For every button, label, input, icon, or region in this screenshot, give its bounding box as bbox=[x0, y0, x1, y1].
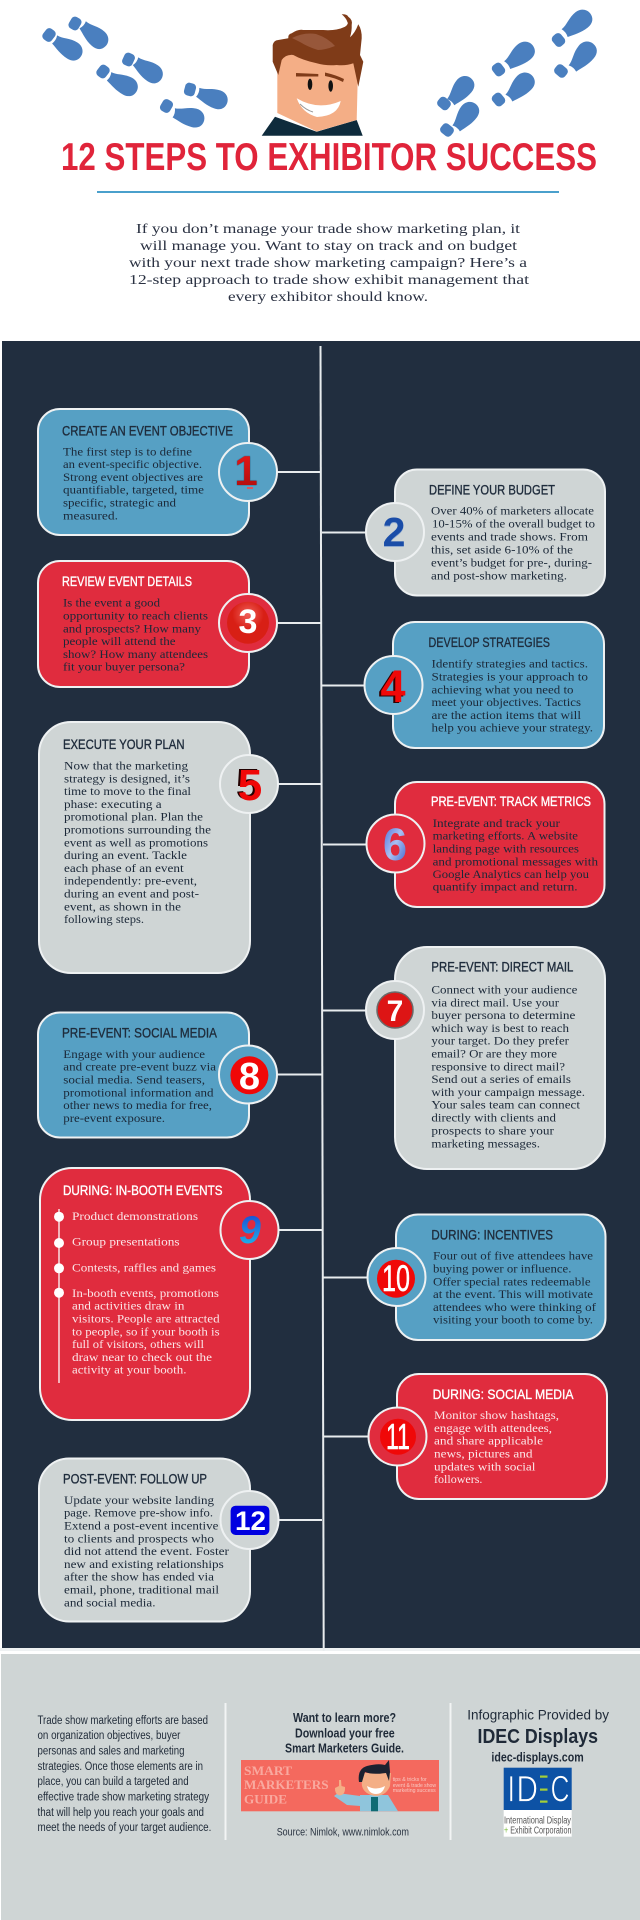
banner: smart marketers guide: SMART bbox=[244, 1764, 293, 1778]
body text: step 7: marketing messages. bbox=[431, 1138, 540, 1150]
body text: step 5: event, as shown in the bbox=[64, 901, 181, 913]
bullet text: and activities draw in bbox=[72, 1301, 185, 1313]
body text: step 12: and social media. bbox=[64, 1597, 156, 1609]
heading: step 4: DEVELOP STRATEGIES bbox=[428, 635, 550, 650]
body text: step 11: and share applicable bbox=[434, 1436, 543, 1448]
body text: step 11 bbox=[434, 1410, 559, 1486]
bullet text: full of visitors, others will bbox=[72, 1339, 204, 1351]
body text: step 1 bbox=[63, 446, 204, 522]
badge: number 6: 6 bbox=[383, 819, 407, 870]
logo: IDEC: I bbox=[508, 1769, 515, 1810]
body text: step 5: following steps. bbox=[64, 914, 144, 926]
panel: step 3 bbox=[38, 561, 321, 687]
body text: step 7: which way is best to reach bbox=[431, 1023, 569, 1035]
bullet text: activity at your booth. bbox=[72, 1365, 187, 1377]
body text: step 12: page. Remove pre-show info. bbox=[64, 1508, 213, 1520]
badge: number 1: 1 bbox=[234, 447, 258, 494]
footer summary text: Trade show marketing efforts are based bbox=[38, 1715, 208, 1727]
body text: step 1: Strong event objectives are bbox=[63, 472, 203, 484]
panel: step 12 bbox=[39, 1458, 322, 1622]
body text: step 5: Now that the marketing bbox=[64, 761, 188, 773]
banner: smart marketers guide bbox=[241, 1760, 439, 1811]
heading: step 12: POST-EVENT: FOLLOW UP bbox=[63, 1472, 207, 1486]
body text: step 2: events and trade shows. From bbox=[431, 532, 588, 544]
banner: smart marketers guide: GUIDE bbox=[244, 1792, 287, 1806]
panel: step 4 bbox=[322, 622, 604, 748]
bullet text: In-booth events, promotions bbox=[72, 1288, 220, 1300]
body text: step 12: email, phone, traditional mail bbox=[64, 1585, 219, 1597]
body text: step 1: specific, strategic and bbox=[63, 497, 176, 509]
badge: number 5: 5 bbox=[238, 761, 262, 810]
icon: pointing man bbox=[334, 1760, 398, 1811]
body text: step 10 bbox=[433, 1251, 596, 1327]
body text: step 6: quantify impact and return. bbox=[433, 882, 578, 894]
body text: step 11: engage with attendees, bbox=[434, 1423, 552, 1435]
panel: step 10 bbox=[323, 1214, 606, 1340]
body text: step 2: this, set aside 6-10% of the bbox=[431, 544, 573, 556]
badge: number 9 bbox=[220, 1201, 278, 1259]
intro text bbox=[129, 222, 529, 305]
badge: number 5 bbox=[220, 755, 278, 813]
body text: step 10: buying power or influence. bbox=[433, 1264, 572, 1276]
body text: step 5: time to move to the final bbox=[64, 786, 191, 798]
body text: step 4: help you achieve your strategy. bbox=[432, 723, 593, 735]
body text: step 7: with your campaign message. bbox=[431, 1087, 585, 1099]
heading: step 1: CREATE AN EVENT OBJECTIVE bbox=[62, 424, 233, 438]
body text: step 10: at the event. This will motivate bbox=[433, 1289, 593, 1301]
footprints right bbox=[435, 6, 601, 138]
body text: step 3: opportunity to reach clients bbox=[63, 610, 209, 622]
bullet text: to people, so if your booth is bbox=[72, 1326, 220, 1338]
body text: step 4: meet your objectives. Tactics bbox=[432, 697, 582, 709]
body text: step 7: prospects to share your bbox=[431, 1125, 554, 1137]
body text: step 5: independently: pre-event, bbox=[64, 876, 197, 888]
panel: step 9 bbox=[40, 1168, 322, 1420]
banner tagline: marketing success bbox=[393, 1788, 436, 1794]
body text: step 7: your target. Do they prefer bbox=[431, 1036, 569, 1048]
footer panel bbox=[1, 1654, 640, 1920]
body text: step 5 bbox=[64, 761, 211, 926]
body text: step 1: quantifiable, targeted, time bbox=[63, 485, 204, 497]
footer summary text: place, you can build a targeted and bbox=[38, 1776, 189, 1788]
source credit: Source: Nimlok, www.nimlok.com bbox=[277, 1826, 409, 1838]
body text: step 11: updates with social bbox=[434, 1461, 536, 1473]
body text: step 11: news, pictures and bbox=[434, 1448, 533, 1460]
badge: number 8 bbox=[219, 1046, 277, 1104]
panel: step 1 bbox=[38, 409, 321, 535]
body text: step 3: and prospects? How many bbox=[63, 623, 201, 635]
badge: number 3 bbox=[219, 594, 277, 652]
body text: step 12: did not attend the event. Foster bbox=[64, 1546, 229, 1558]
body text: step 7 bbox=[431, 985, 585, 1150]
body text: step 4 bbox=[432, 659, 593, 735]
body text: step 7: buyer persona to determine bbox=[431, 1010, 575, 1022]
call to action text: Want to learn more? bbox=[293, 1711, 396, 1725]
bullet text: Contests, raffles and games bbox=[72, 1262, 217, 1274]
intro text: with your next trade show marketing campaign? Here’s a bbox=[129, 256, 528, 271]
body text: step 8: Engage with your audience bbox=[63, 1049, 205, 1061]
body text: step 5: promotional plan. Plan the bbox=[64, 812, 203, 824]
body text: step 12: to clients and prospects who bbox=[64, 1533, 214, 1545]
banner tagline bbox=[393, 1777, 436, 1794]
logo: IDEC: + Exhibit Corporation bbox=[504, 1826, 572, 1836]
badge: number 12: 12 bbox=[235, 1506, 266, 1536]
bullet text: Product demonstrations bbox=[72, 1211, 199, 1223]
body text: step 3 bbox=[63, 598, 209, 674]
heading: step 7: PRE-EVENT: DIRECT MAIL bbox=[431, 960, 574, 974]
call to action text: Smart Marketers Guide. bbox=[285, 1742, 404, 1756]
body text: step 6: and promotional messages with bbox=[433, 856, 598, 868]
body text: step 8: other news to media for free, bbox=[63, 1100, 212, 1112]
body text: step 3: show? How many attendees bbox=[63, 649, 209, 661]
body text: step 12: after the show has ended via bbox=[64, 1572, 214, 1584]
body text: step 2: event’s budget for pre-, during- bbox=[431, 557, 592, 569]
badge: number 10 bbox=[368, 1248, 426, 1306]
badge: number 8: 8 bbox=[239, 1056, 260, 1098]
body text: step 5: strategy is designed, it’s bbox=[64, 773, 191, 785]
footer summary text: strategies. Once those elements are in bbox=[38, 1761, 203, 1773]
body text: step 5: promotions surrounding the bbox=[64, 824, 211, 836]
body text: step 1: The first step is to define bbox=[63, 446, 192, 458]
badge: number 11: 11 bbox=[386, 1416, 410, 1457]
badge: number 6 bbox=[366, 814, 424, 872]
body text: step 2 bbox=[431, 506, 595, 582]
body text: step 12: Extend a post-event incentive bbox=[64, 1521, 218, 1533]
body text: step 12: Update your website landing bbox=[64, 1495, 214, 1507]
panel: step 2 bbox=[322, 470, 605, 596]
body text: step 8: pre-event exposure. bbox=[63, 1113, 165, 1125]
footer summary text bbox=[38, 1715, 211, 1834]
body text: step 11: followers. bbox=[434, 1474, 483, 1486]
body text: step 10: Offer special rates redeemable bbox=[433, 1276, 591, 1288]
body text: step 8 bbox=[63, 1049, 216, 1125]
body text: step 7: responsive to direct mail? bbox=[431, 1061, 565, 1073]
call to action text: Download your free bbox=[295, 1726, 395, 1740]
provider credit: Infographic Provided by bbox=[467, 1706, 609, 1722]
body text: step 2: Over 40% of marketers allocate bbox=[431, 506, 594, 518]
badge: number 7: 7 bbox=[387, 995, 403, 1028]
body text: step 5: phase: executing a bbox=[64, 799, 162, 811]
body text: step 4: Identify strategies and tactics. bbox=[432, 659, 588, 671]
timeline vertical line bbox=[320, 346, 324, 1651]
body text: step 4: Strategies is your approach to bbox=[432, 672, 588, 684]
badge: number 12 bbox=[220, 1491, 278, 1549]
intro text: will manage you. Want to stay on track and on budget bbox=[140, 239, 517, 254]
panel: step 5 bbox=[39, 722, 321, 973]
badge: number 4 bbox=[364, 656, 422, 714]
body text: step 7: Your sales team can connect bbox=[431, 1100, 581, 1112]
banner tagline: event & trade show bbox=[393, 1783, 436, 1789]
body text: step 7: Send out a series of emails bbox=[431, 1074, 572, 1086]
logo: IDEC: D bbox=[516, 1769, 538, 1810]
panel: step 8 bbox=[38, 1012, 322, 1138]
body text: step 3: people will attend the bbox=[63, 636, 176, 648]
body text: step 5: during an event and post- bbox=[64, 888, 199, 900]
intro text: If you don’t manage your trade show marketing plan, it bbox=[136, 222, 520, 237]
badge: number 11 bbox=[368, 1408, 426, 1466]
bullet text: visitors. People are attracted bbox=[72, 1313, 220, 1325]
footer summary text: on organization objectives, buyer bbox=[38, 1730, 181, 1742]
footer summary text: that will help you reach your goals and bbox=[38, 1807, 204, 1819]
body text: step 12: new and existing relationships bbox=[64, 1559, 224, 1571]
footer summary text: personas and sales and marketing bbox=[38, 1746, 184, 1758]
body text: step 6: landing page with resources bbox=[433, 843, 580, 855]
body text: step 10: visiting your booth to come by. bbox=[433, 1315, 593, 1327]
bullet text: Group presentations bbox=[72, 1237, 180, 1249]
banner: smart marketers guide: MARKETERS bbox=[244, 1778, 329, 1792]
logo: IDEC: International Display bbox=[504, 1815, 571, 1826]
body text: step 8: and create pre-event buzz via bbox=[63, 1062, 216, 1074]
body text: step 2: and post-show marketing. bbox=[431, 570, 567, 582]
body text: step 8: social media. Send teasers, bbox=[63, 1074, 205, 1086]
body text: step 6: Integrate and track your bbox=[433, 818, 560, 830]
provider credit bbox=[467, 1706, 609, 1764]
intro text: every exhibitor should know. bbox=[228, 290, 428, 305]
bullet timeline bbox=[54, 1209, 64, 1383]
panel: step 11 bbox=[324, 1374, 607, 1499]
heading: step 11: DURING: SOCIAL MEDIA bbox=[433, 1387, 574, 1402]
badge: number 3: 3 bbox=[239, 603, 257, 641]
bullet text: draw near to check out the bbox=[72, 1352, 212, 1364]
body text: step 7: Connect with your audience bbox=[431, 985, 577, 997]
body text: step 6: Google Analytics can help you bbox=[433, 869, 589, 881]
provider credit: IDEC Displays bbox=[478, 1726, 598, 1748]
footprints left bbox=[41, 15, 230, 130]
body text: step 6: marketing efforts. A website bbox=[433, 831, 578, 843]
footer summary text: effective trade show marketing strategy bbox=[38, 1792, 209, 1804]
bullet text bbox=[72, 1211, 220, 1377]
heading: step 6: PRE-EVENT: TRACK METRICS bbox=[431, 794, 591, 809]
logo: IDEC bbox=[504, 1768, 572, 1837]
badge: number 2: 2 bbox=[383, 509, 405, 555]
body text: step 5: event as well as promotions bbox=[64, 837, 209, 849]
call to action text bbox=[285, 1711, 404, 1756]
provider credit: idec-displays.com bbox=[491, 1750, 584, 1764]
dark timeline panel bbox=[2, 341, 640, 1648]
heading: step 8: PRE-EVENT: SOCIAL MEDIA bbox=[62, 1026, 217, 1040]
footer summary text: meet the needs of your target audience. bbox=[38, 1822, 211, 1834]
body text: step 12 bbox=[64, 1495, 229, 1609]
body text: step 5: each phase of an event bbox=[64, 863, 185, 875]
body text: step 5: during an event. Tackle bbox=[64, 850, 187, 862]
body text: step 11: Monitor show hashtags, bbox=[434, 1410, 559, 1422]
badge: number 7 bbox=[366, 981, 424, 1039]
body text: step 2: 10-15% of the overall budget to bbox=[432, 519, 595, 531]
body text: step 4: achieving what you need to bbox=[432, 684, 574, 696]
badge: number 4: 4 bbox=[380, 661, 406, 712]
icon: smiling man mascot bbox=[262, 14, 363, 136]
body text: step 7: directly with clients and bbox=[431, 1113, 556, 1125]
heading: step 2: DEFINE YOUR BUDGET bbox=[429, 482, 555, 498]
badge: number 9: 9 bbox=[239, 1209, 261, 1252]
banner tagline: tips & tricks for bbox=[393, 1777, 427, 1783]
body text: step 3: fit your buyer persona? bbox=[63, 662, 185, 674]
intro text: 12-step approach to trade show exhibit management that bbox=[129, 273, 529, 288]
heading: step 9: DURING: IN-BOOTH EVENTS bbox=[63, 1183, 222, 1198]
body text: step 7: via direct mail. Use your bbox=[431, 997, 559, 1009]
body text: step 6 bbox=[433, 818, 598, 894]
heading: step 3: REVIEW EVENT DETAILS bbox=[62, 574, 192, 589]
body text: step 1: an event-specific objective. bbox=[63, 459, 202, 471]
heading: step 5: EXECUTE YOUR PLAN bbox=[63, 737, 184, 752]
body text: step 3: Is the event a good bbox=[63, 598, 160, 610]
body text: step 10: Four out of five attendees have bbox=[433, 1251, 593, 1263]
badge: number 10: 10 bbox=[382, 1258, 410, 1299]
body text: step 8: promotional information and bbox=[63, 1087, 214, 1099]
badge: number 2 bbox=[366, 503, 424, 561]
body text: step 4: are the action items that will bbox=[432, 710, 581, 722]
panel: step 7 bbox=[323, 947, 605, 1169]
logo: IDEC: C bbox=[550, 1769, 570, 1810]
body text: step 7: email? Or are they more bbox=[431, 1049, 557, 1061]
panel: step 6 bbox=[323, 782, 604, 907]
heading: step 10: DURING: INCENTIVES bbox=[431, 1228, 553, 1242]
body text: step 1: measured. bbox=[63, 510, 118, 522]
body text: step 10: attendees who were thinking of bbox=[433, 1302, 596, 1314]
badge: number 1 bbox=[219, 443, 277, 501]
